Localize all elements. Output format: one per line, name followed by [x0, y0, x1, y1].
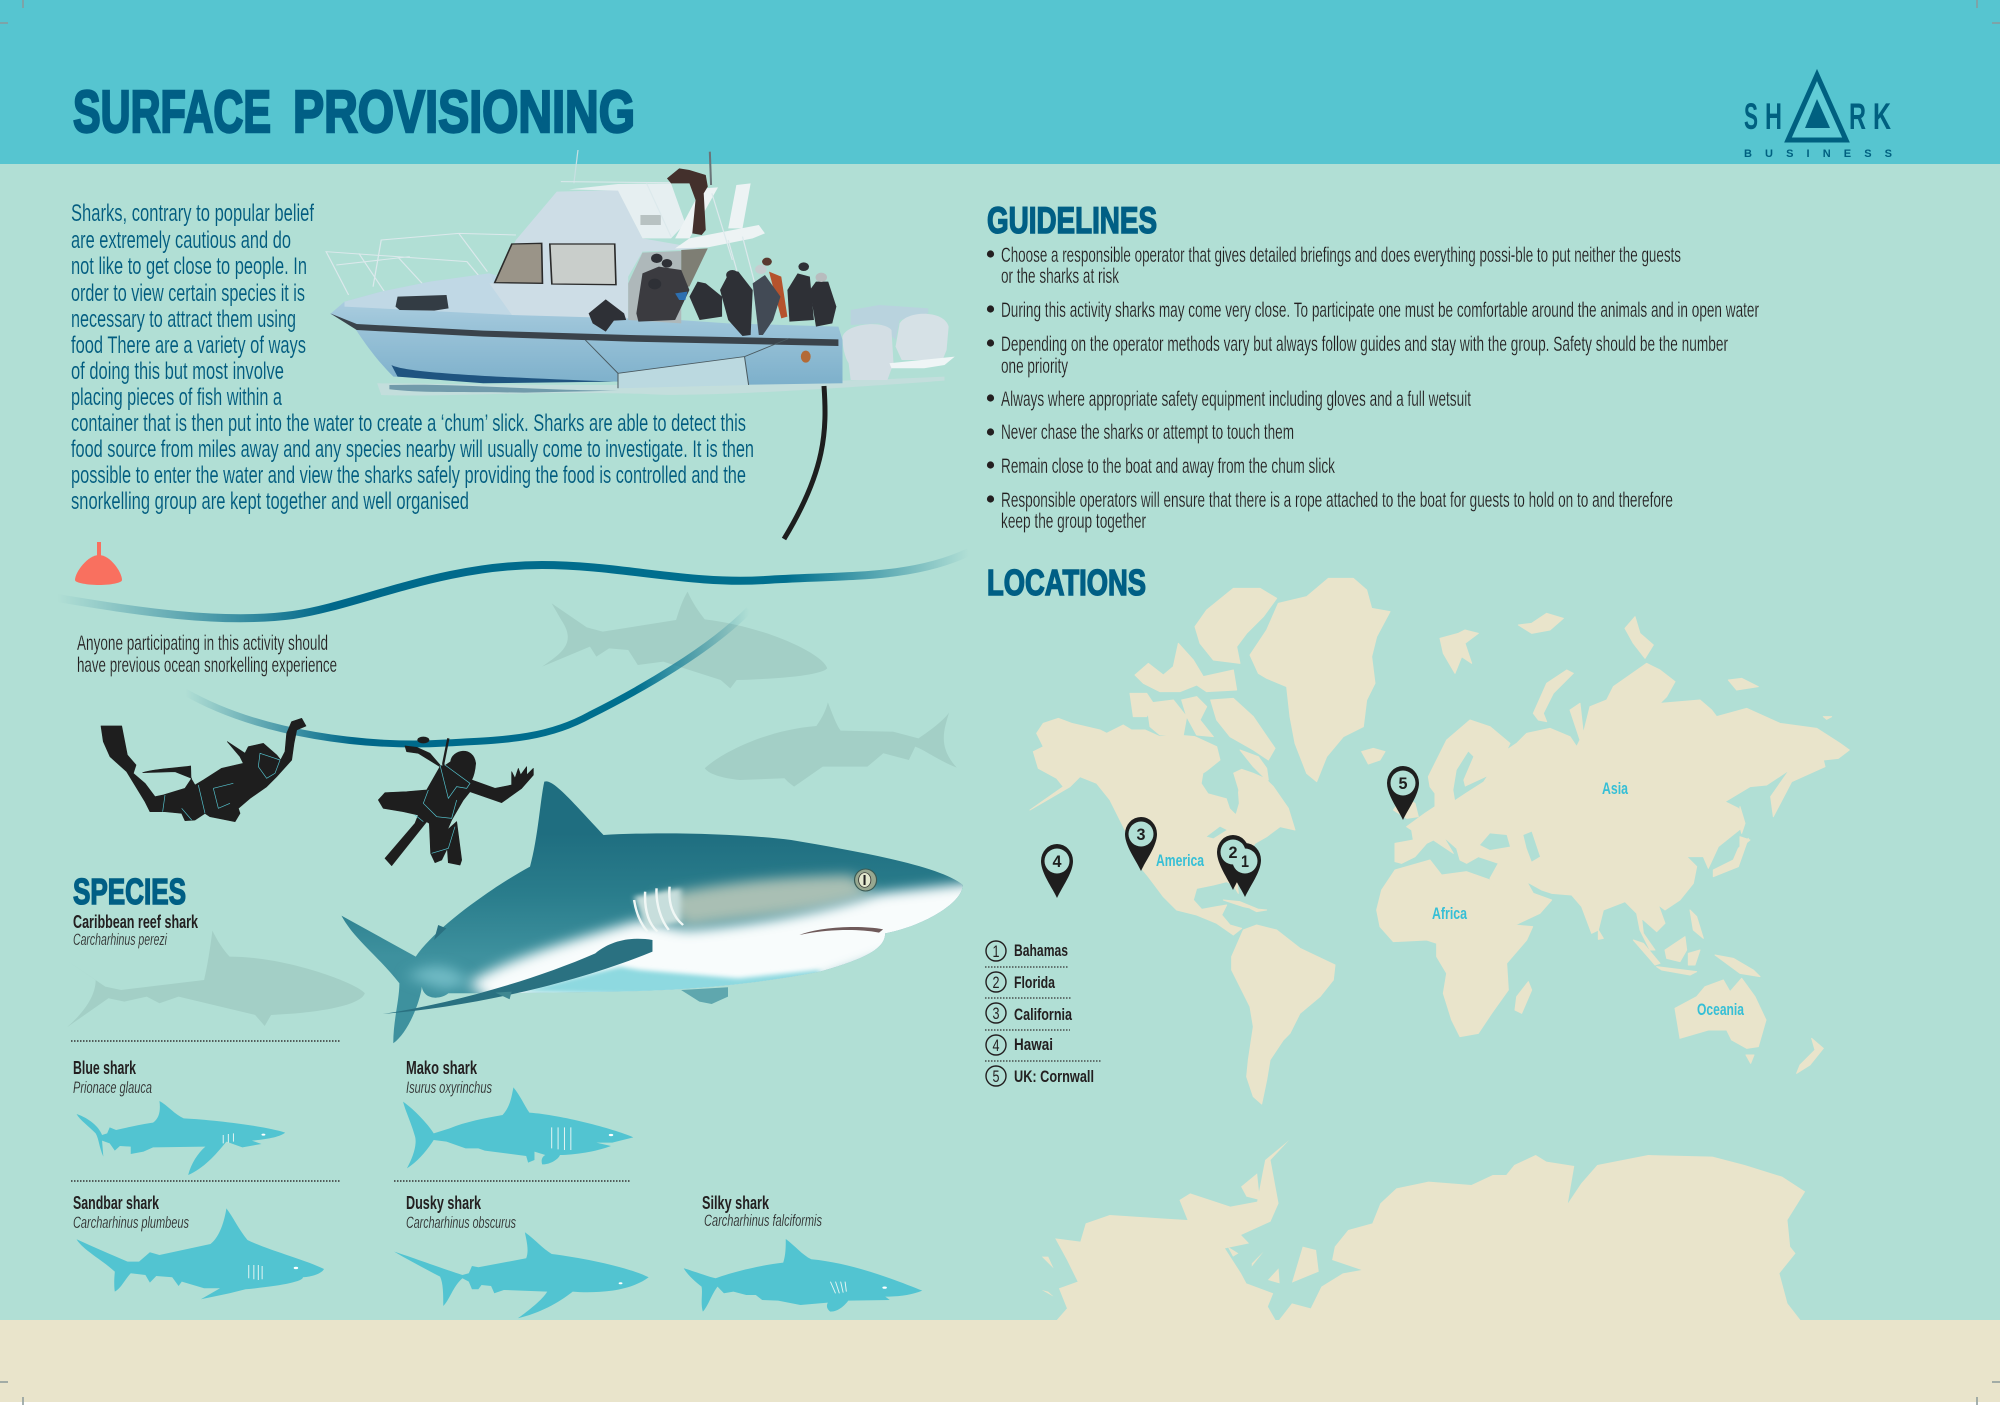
boat foredeck [344, 273, 512, 315]
boat doorway [628, 251, 681, 323]
logo letters: S [1744, 96, 1758, 137]
species label: mako shark: Isurus oxyrinchus [406, 1078, 492, 1097]
pins 1 and 2 bahamas and florida [1217, 835, 1261, 897]
logo letters: BUSINESS [1744, 148, 1892, 160]
shark gills [634, 887, 683, 932]
group of guests [589, 254, 836, 336]
snorkeller right [378, 737, 533, 866]
species label: blue shark [73, 1058, 152, 1097]
continent labels: Africa [1432, 904, 1467, 923]
small shark silhouettes [77, 1087, 922, 1318]
icon: blue shark [77, 1101, 285, 1175]
faint shark upper [542, 592, 827, 688]
guidelines list: one priority [1001, 354, 1068, 378]
locations legend: Hawai [1014, 1035, 1053, 1054]
continent labels: Oceania [1697, 1000, 1744, 1019]
species label: mako shark [406, 1058, 492, 1097]
species label: dusky shark: Dusky shark [406, 1193, 482, 1213]
pin 4 hawaii: 4 [1052, 852, 1062, 871]
intro text block: Sharks, contrary to popular belief [71, 200, 314, 227]
boat water [377, 377, 945, 395]
greenland [1250, 578, 1390, 782]
species label: sandbar shark [73, 1193, 189, 1232]
iceland [1362, 748, 1385, 764]
locations legend: Bahamas [1014, 941, 1068, 960]
locations legend: 4 [992, 1036, 1000, 1055]
locations legend: 1 [992, 942, 1000, 961]
guidelines list: keep the group together [1001, 509, 1146, 533]
species label: blue shark: Prionace glauca [73, 1078, 152, 1097]
shark mouth [799, 927, 883, 935]
pin 3 california: 3 [1136, 825, 1146, 844]
shark anal fin [681, 987, 728, 1004]
boat hull [330, 273, 842, 385]
species label: dusky shark: Carcharhinus obscurus [406, 1213, 516, 1232]
guidelines list: or the sharks at risk [1001, 264, 1119, 288]
intro text block: snorkelling group are kept together and well organised [71, 488, 469, 515]
world map west [1030, 578, 1390, 1104]
rope curve [185, 610, 749, 744]
guidelines list: Always where appropriate safety equipment including gloves and a full wetsuit [1001, 387, 1471, 411]
japan and sakhalin [1713, 807, 1750, 877]
header band [0, 0, 2000, 164]
pins 1 and 2 bahamas and florida: 2 [1228, 843, 1238, 862]
intro text block: of doing this but most involve [71, 358, 284, 385]
antarctica [1042, 1140, 1805, 1321]
experience note: have previous ocean snorkelling experience [77, 654, 337, 677]
species label: silky shark: Carcharhinus falciformis [704, 1211, 822, 1230]
pin 5 cornwall: 5 [1398, 774, 1408, 793]
experience note [77, 632, 337, 677]
baltic, black sea, caspian [1453, 752, 1540, 862]
divers [101, 718, 533, 866]
canadian arctic islands [1130, 588, 1277, 760]
logo [1744, 75, 1892, 160]
logo letters: K [1873, 96, 1891, 137]
locations legend: 2 [992, 973, 1000, 992]
boat windows [495, 243, 542, 283]
guidelines list: Remain close to the boat and away from the chum slick [1001, 454, 1335, 478]
boat mast and aerial [574, 150, 578, 183]
buoy [75, 542, 122, 585]
snorkeller left [101, 718, 306, 822]
icon: mako shark [403, 1087, 633, 1168]
shark eye [855, 869, 877, 891]
boat cage [618, 357, 749, 388]
title: PROVISIONING [293, 79, 635, 145]
map pins [1041, 766, 1419, 898]
south america [1232, 925, 1335, 1104]
icon: silky shark [684, 1239, 922, 1312]
species label: mako shark: Mako shark [406, 1058, 478, 1078]
boat engines [851, 305, 928, 340]
arctic islands [1440, 613, 1832, 722]
pins 1 and 2 bahamas and florida: 1 [1241, 852, 1249, 871]
main reef shark [341, 781, 983, 1043]
locations legend: 3 [992, 1004, 1000, 1023]
title: SURFACE [73, 79, 271, 145]
logo letters [1744, 96, 1892, 160]
logo triangle [1788, 75, 1846, 140]
guidelines list: Never chase the sharks or attempt to touch them [1001, 420, 1294, 444]
world map east [1377, 613, 1849, 1073]
shark pectoral fin [383, 939, 652, 1014]
species heading: SPECIES [73, 871, 186, 912]
madagascar [1515, 982, 1532, 1013]
south east asian islands [1598, 910, 1760, 977]
locations legend [985, 941, 1101, 1086]
pin 3 california [1125, 817, 1157, 871]
intro text block: container that is then put into the water to create a ‘chum’ slick. Sharks are able to detect this [71, 410, 746, 437]
title [73, 79, 635, 145]
species label: sandbar shark: Carcharhinus plumbeus [73, 1213, 189, 1232]
species label: silky shark [702, 1193, 822, 1230]
guidelines heading: GUIDELINES [987, 200, 1157, 241]
intro text block: not like to get close to people. In [71, 253, 307, 280]
anchor line [784, 386, 825, 539]
experience note: Anyone participating in this activity should [77, 632, 328, 655]
boat illustration [326, 150, 955, 395]
locations legend: UK: Cornwall [1014, 1067, 1094, 1086]
boat stripe [330, 313, 838, 346]
africa [1377, 860, 1533, 1037]
caribbean islands [1223, 900, 1267, 912]
hudson and great lakes [1202, 763, 1238, 838]
icon: sandbar shark [77, 1208, 324, 1299]
locations legend: Florida [1014, 973, 1055, 992]
species label: sandbar shark: Sandbar shark [73, 1193, 160, 1213]
intro text block: food There are a variety of ways [71, 332, 306, 359]
pin 5 cornwall [1387, 766, 1419, 820]
intro text block: are extremely cautious and do [71, 227, 291, 254]
species label: caribbean reef shark [73, 912, 199, 949]
species label: dusky shark [406, 1193, 516, 1232]
intro text block: food source from miles away and any species nearby will usually come to investigate. It is then [71, 436, 754, 463]
shark belly shading [408, 875, 983, 1003]
boat fender [801, 351, 811, 363]
boat bow rail [326, 233, 516, 315]
species label: caribbean reef shark: Caribbean reef shark [73, 912, 199, 932]
united kingdom [1393, 797, 1418, 818]
species label: caribbean reef shark: Carcharhinus perezi [73, 930, 168, 949]
boat flybridge [569, 183, 685, 238]
boat cabin [489, 190, 700, 318]
logo letters: H [1765, 96, 1782, 137]
continent labels: America [1156, 851, 1204, 870]
crew on flybridge [667, 168, 708, 235]
intro text block: necessary to attract them using [71, 306, 296, 333]
locations legend: California [1014, 1005, 1072, 1024]
species label: blue shark: Blue shark [73, 1058, 137, 1078]
north america [1030, 718, 1295, 935]
intro text block: order to view certain species it is [71, 280, 305, 307]
species label: silky shark: Silky shark [702, 1193, 770, 1213]
intro text block: placing pieces of fish within a [71, 384, 282, 411]
shark body [341, 781, 963, 1043]
intro text block: possible to enter the water and view the sharks safely providing the food is controlled and the [71, 462, 746, 489]
guidelines list [987, 243, 1759, 533]
faint shark right [705, 702, 957, 787]
locations legend: 5 [992, 1067, 1000, 1086]
surface wave [57, 552, 969, 618]
eurasia [1395, 663, 1849, 950]
logo letters: R [1849, 96, 1866, 137]
australia [1675, 978, 1766, 1048]
tasmania and new zealand [1746, 1038, 1823, 1073]
faint shark caribbean [67, 931, 365, 1027]
continent labels [1156, 779, 1744, 1019]
faint background sharks [67, 592, 957, 1027]
icon: dusky shark [394, 1232, 649, 1318]
locations heading: LOCATIONS [987, 562, 1146, 603]
boat waterline [391, 365, 614, 383]
pin 4 hawaii [1041, 844, 1073, 898]
continent labels: Asia [1602, 779, 1628, 798]
intro text block [71, 200, 754, 515]
footer band [0, 1320, 2000, 1402]
